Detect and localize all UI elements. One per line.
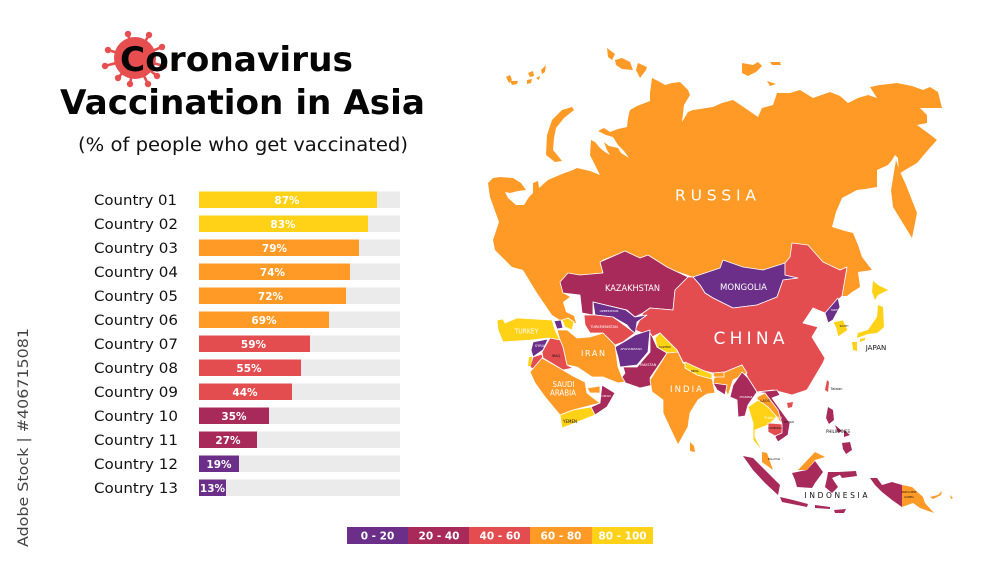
bar chart: 79% — [262, 243, 288, 255]
country: Laos — [757, 393, 782, 424]
title: Coronavirus — [120, 40, 353, 80]
country: Oman — [591, 385, 615, 415]
map labels: MALAYSIA — [768, 457, 780, 461]
country: Malaysia — [762, 452, 825, 470]
map labels: INDONESIA — [804, 491, 868, 500]
map labels: GUINEA — [904, 495, 914, 499]
bar chart: 72% — [258, 291, 284, 303]
bar chart: 74% — [260, 267, 286, 279]
title: Vaccination in Asia — [60, 83, 425, 123]
map labels: KAZAKHSTAN — [605, 284, 660, 294]
country: Georgia and Armenia — [554, 320, 563, 329]
country: Kashmir — [655, 333, 678, 353]
country: UAE — [587, 386, 600, 393]
subtitle: (% of people who get vaccinated) — [78, 135, 408, 156]
island: Novaya Zemlya — [546, 107, 574, 162]
bar chart: Country 12 — [94, 456, 178, 473]
bar chart: 35% — [221, 411, 247, 423]
map labels: OMAN — [601, 394, 611, 398]
map labels: PAPUA NEW — [902, 490, 917, 494]
bar chart: Country 09 — [94, 384, 178, 401]
map labels: UZBEKISTAN — [600, 309, 618, 313]
country: Russia — [488, 48, 942, 323]
country: Indonesia — [743, 456, 902, 513]
country: Turkey — [497, 318, 560, 342]
country: Afghanistan — [615, 330, 650, 367]
country: Turkmenistan — [584, 315, 635, 345]
bar chart: 87% — [274, 195, 300, 207]
map labels: IRAN — [581, 349, 605, 358]
bar chart: 69% — [251, 315, 277, 327]
island: Franz Josef Land — [506, 65, 546, 85]
bar chart: 44% — [232, 387, 258, 399]
map labels: KASHMIR — [659, 345, 671, 349]
country: Saudi Arabia — [530, 358, 600, 415]
map labels: MONGOLIA — [720, 283, 768, 293]
bar chart: 27% — [215, 435, 241, 447]
legend: 0 - 20 — [361, 530, 394, 542]
map labels: SAUDI — [552, 380, 574, 389]
bar chart: 13% — [200, 483, 226, 495]
country: Bangladesh — [713, 383, 727, 395]
region: Taiwan and Hainan — [787, 380, 829, 408]
map labels: JAPAN — [865, 344, 886, 352]
country: Cambodia — [768, 423, 782, 436]
region: northeast India — [713, 365, 747, 396]
map labels: ARABIA — [550, 388, 576, 398]
legend: 60 - 80 — [541, 530, 581, 542]
bar chart: 83% — [270, 219, 296, 231]
country: Thailand — [748, 400, 777, 452]
country: Kazakhstan — [560, 251, 688, 317]
map labels: VIETNAM — [784, 421, 794, 424]
map labels: AFGHANISTAN — [620, 347, 642, 351]
country: Mongolia — [693, 260, 798, 308]
bar chart: Country 10 — [94, 408, 178, 425]
country: Nepal — [685, 362, 712, 379]
map labels: PAKISTAN — [640, 363, 657, 367]
bar chart: Country 04 — [94, 264, 178, 281]
map of Asia — [488, 48, 953, 513]
legend — [347, 527, 653, 544]
bar chart: Country 08 — [94, 360, 178, 377]
country: India — [650, 352, 715, 445]
map labels: TURKMENISTAN — [589, 325, 618, 329]
bar chart: Country 02 — [94, 216, 178, 233]
map labels: NORTH — [831, 309, 839, 312]
legend: 80 - 100 — [598, 530, 647, 542]
map labels: YEMEN — [562, 419, 577, 424]
bar chart: 59% — [241, 339, 267, 351]
country: Philippines — [826, 407, 852, 454]
legend: 20 - 40 — [419, 530, 459, 542]
map labels: CAMBODIA — [768, 426, 782, 430]
country: Vietnam — [757, 390, 790, 442]
map labels: IRAQ — [552, 354, 560, 358]
map labels: NEPAL — [691, 369, 700, 373]
country: Iraq — [542, 338, 573, 370]
country: North Korea — [825, 298, 840, 323]
map labels: INDIA — [670, 385, 702, 395]
map labels: CHINA — [714, 329, 785, 349]
stock credit: Adobe Stock | #406715081 — [16, 328, 32, 547]
bar chart: 55% — [236, 363, 262, 375]
country: China — [635, 243, 847, 395]
map labels: RUSSIA — [675, 186, 756, 204]
country: Jordan — [530, 354, 543, 369]
country: Iran — [557, 330, 625, 383]
map labels: SYRIA — [535, 344, 546, 348]
country: Yemen — [560, 407, 595, 428]
title — [60, 40, 425, 123]
country: Bhutan — [713, 372, 724, 377]
bar chart: Country 11 — [94, 432, 178, 449]
bar chart: Country 03 — [94, 240, 178, 257]
bar chart — [94, 192, 400, 497]
icon: coronavirus — [102, 31, 167, 87]
bar chart: Country 07 — [94, 336, 178, 353]
map labels: Taiwan — [830, 387, 842, 391]
map labels — [514, 186, 917, 500]
map labels: TURKEY — [514, 328, 539, 336]
legend: 40 - 60 — [480, 530, 520, 542]
map labels: SOUTH — [840, 324, 849, 328]
island: Sakhalin — [891, 160, 917, 238]
country: South Korea — [833, 320, 848, 337]
country: Japan — [852, 281, 888, 351]
country: Myanmar — [730, 372, 757, 417]
bar chart: Country 05 — [94, 288, 178, 305]
island: Severnaya Zemlya — [607, 48, 781, 86]
bar chart: Country 13 — [94, 480, 178, 497]
map labels: THAILAND — [763, 416, 782, 420]
country: Papua New Guinea — [902, 485, 953, 513]
country: Pakistan — [622, 333, 667, 388]
bar chart: Country 01 — [94, 192, 177, 209]
country: Syria — [531, 339, 548, 357]
country: Azerbaijan — [562, 318, 574, 330]
country: Uzbekistan and Tajikistan — [593, 302, 647, 335]
bar chart: Country 06 — [94, 312, 178, 329]
country: Sri Lanka — [690, 442, 695, 452]
map labels: PHILIPPINES — [826, 429, 850, 434]
map labels: LAOS — [760, 399, 770, 403]
country: Israel — [528, 357, 532, 366]
map labels: MYANMAR — [740, 395, 753, 399]
bar chart: 19% — [206, 459, 232, 471]
